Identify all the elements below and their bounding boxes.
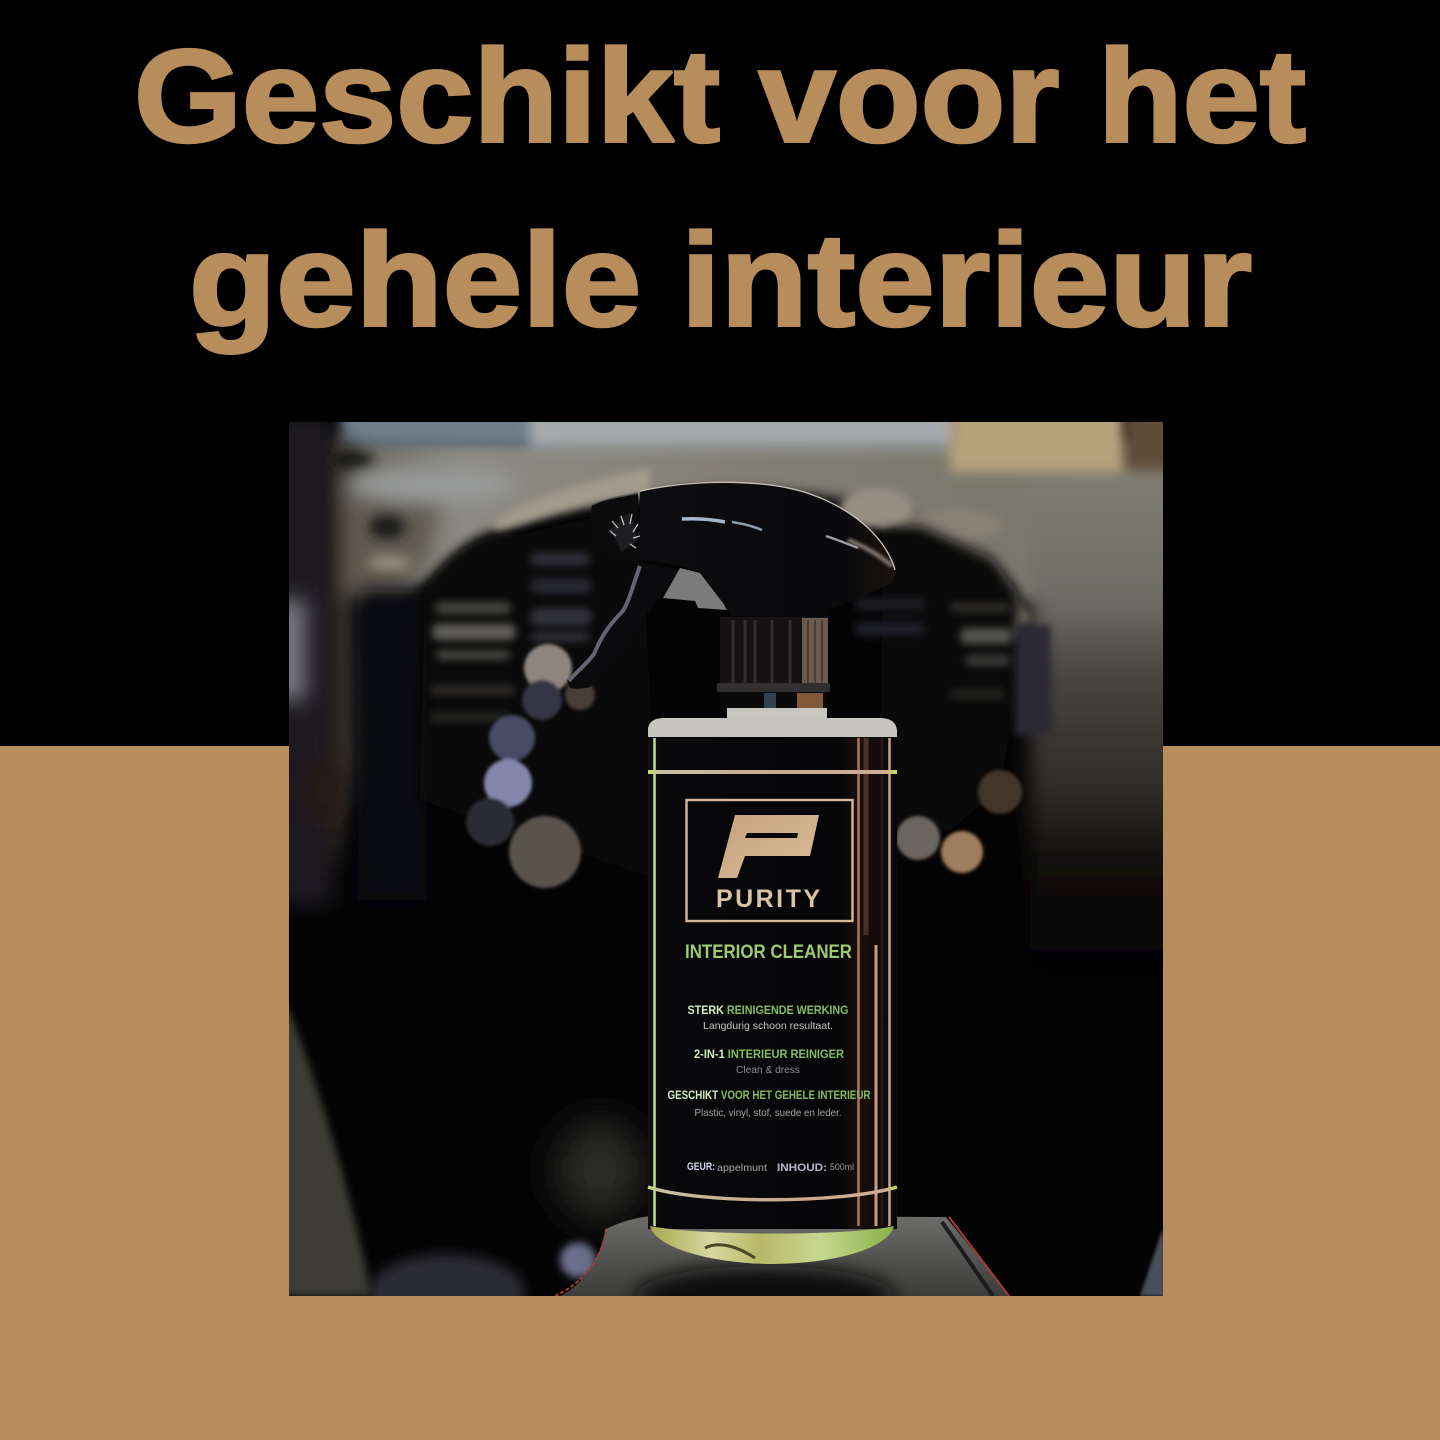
P logo xyxy=(718,815,819,878)
label text: INTERIOR CLEANER xyxy=(685,942,852,963)
trigger guard xyxy=(663,568,727,610)
nozzle xyxy=(591,494,638,518)
photo background xyxy=(289,746,1163,1296)
trigger xyxy=(567,563,680,689)
bottle xyxy=(567,482,897,1264)
logo box: PURITY xyxy=(716,885,820,913)
leather armrest xyxy=(554,1216,1010,1296)
label text: Langdurig schoon resultaat. xyxy=(703,1020,833,1032)
title: Geschikt voor het xyxy=(134,22,1306,170)
tan lower background xyxy=(0,746,1440,1440)
spray head xyxy=(567,482,895,710)
label text: 500ml xyxy=(830,1162,854,1173)
title xyxy=(134,22,1306,354)
label text: GESCHIKT VOOR HET GEHELE INTERIEUR xyxy=(668,1090,871,1102)
label text: Clean & dress xyxy=(736,1064,800,1076)
foam neck xyxy=(648,708,897,738)
bokeh lights xyxy=(466,644,1022,888)
logo box xyxy=(686,800,852,921)
label text: appelmunt xyxy=(717,1162,767,1174)
label text: 2-IN-1 INTERIEUR REINIGER xyxy=(694,1049,845,1061)
label text: STERK REINIGENDE WERKING xyxy=(688,1005,849,1017)
label text: Plastic, vinyl, stof, suede en leder. xyxy=(694,1107,842,1119)
blurred windshield and dashboard arch xyxy=(335,400,1230,970)
dark vent openings xyxy=(420,510,1019,880)
reflections xyxy=(654,738,890,1226)
collar xyxy=(720,617,828,685)
label text xyxy=(668,942,871,1174)
tone overlay on background xyxy=(289,422,1163,895)
label bands xyxy=(648,770,897,774)
label text: INHOUD: xyxy=(777,1162,827,1174)
black upper background xyxy=(0,0,1440,746)
photo: bottle on car dashboard xyxy=(289,422,1163,1296)
blurred lower cabin shapes xyxy=(270,1005,1170,1330)
label text: GEUR: xyxy=(687,1161,715,1173)
bottle body xyxy=(648,737,897,1229)
bottom liquid xyxy=(650,1226,894,1264)
blurred air vents xyxy=(430,552,1051,735)
head body xyxy=(640,482,895,618)
blurred left steering area xyxy=(289,422,512,912)
title: gehele interieur xyxy=(189,206,1252,354)
